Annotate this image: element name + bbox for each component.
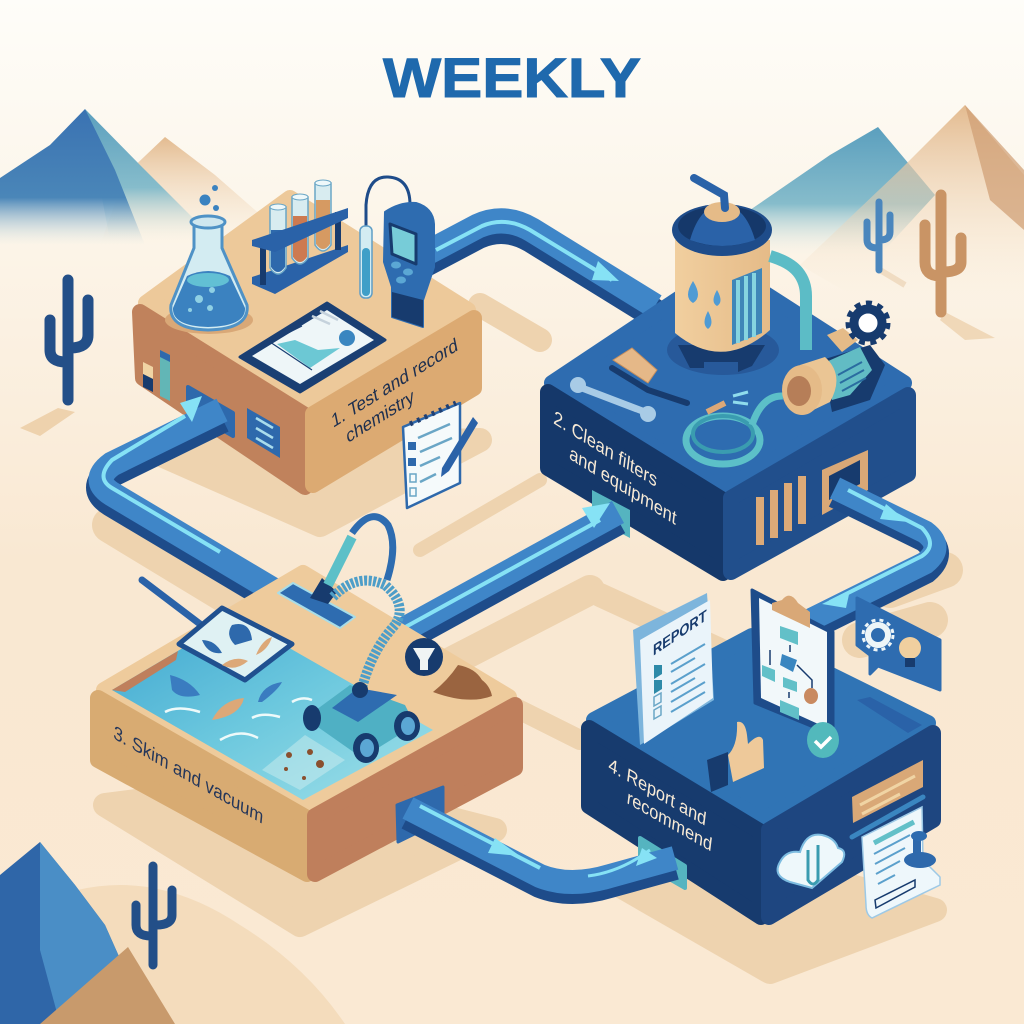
mountains: top right	[750, 105, 1024, 300]
arrow pipe: step 1 to step 2	[425, 221, 655, 314]
arrow pipe: step 3 to step 2	[385, 503, 618, 648]
icon: idea bubble	[857, 598, 940, 690]
panel: step 2 platform	[548, 178, 908, 573]
icon: notepad checklist	[403, 403, 478, 508]
icon: cactus bottom	[136, 866, 172, 965]
icon: pump	[782, 328, 885, 415]
icon: pipe socket	[188, 387, 233, 436]
step 1 label: chemistry	[344, 384, 416, 447]
icon: filter badge	[405, 638, 443, 676]
icon: vent slats	[760, 476, 802, 545]
arrow pipe: step 3 to step 1	[101, 396, 290, 608]
pool water	[112, 617, 433, 800]
arrow pipe: step 2 to step 4	[800, 488, 935, 632]
icon: thumbs up	[707, 722, 764, 792]
icon: control panel	[247, 408, 280, 458]
icon: outlet socket	[822, 450, 868, 515]
arrow pipe: step 3 to step 4	[408, 806, 675, 890]
side bars	[143, 350, 170, 401]
water ripples	[165, 698, 312, 740]
icon: clipboard flowchart	[752, 590, 839, 758]
icon: digital meter	[360, 177, 434, 327]
title: WEEKLY	[383, 46, 641, 109]
icon: debris pile	[433, 665, 492, 700]
icon: cactus right tan	[925, 195, 995, 340]
icon: pipe socket	[592, 490, 630, 538]
slot	[857, 697, 922, 733]
step 4 label: recommend	[626, 786, 713, 856]
step 1 label: 1. Test and record	[330, 333, 459, 432]
icon: wrench	[570, 377, 656, 422]
icon: test tube rack	[252, 180, 348, 294]
icon: outlet socket	[397, 787, 443, 842]
icon: flask	[165, 185, 253, 334]
icon: brush	[612, 348, 687, 403]
icon: tablet	[240, 303, 385, 392]
icon: report document: REPORT	[653, 607, 707, 660]
icon: vacuum head and hose	[278, 517, 400, 688]
step 2 label: 2. Clean filters	[552, 407, 658, 492]
panel: step 1 platform	[140, 177, 474, 487]
panel: step 4 platform	[589, 590, 940, 918]
step 2 label: and equipment	[568, 443, 678, 530]
icon: cactus left	[20, 280, 88, 436]
icon: cactus right blue	[867, 202, 905, 285]
icon: report document	[633, 593, 714, 745]
icon: note bar	[852, 760, 923, 823]
icon: gear	[848, 303, 888, 343]
step 3 label: 3. Skim and vacuum	[112, 722, 264, 829]
ground shadows	[105, 305, 945, 972]
icon: contract scroll	[852, 797, 940, 918]
icon: leaves	[170, 675, 282, 720]
icon: cloud link	[778, 835, 844, 888]
icon: skimmer net	[142, 580, 292, 680]
icon: filter tank	[667, 178, 806, 375]
icon: robot vacuum	[262, 682, 420, 790]
mountains: top left	[0, 109, 295, 245]
icon: pipe socket	[640, 838, 685, 888]
panel: step 3 platform	[98, 517, 515, 874]
step 4 label: 4. Report and	[608, 753, 708, 830]
icon: hose coil	[686, 392, 783, 464]
mountains: bottom left	[0, 842, 345, 1024]
